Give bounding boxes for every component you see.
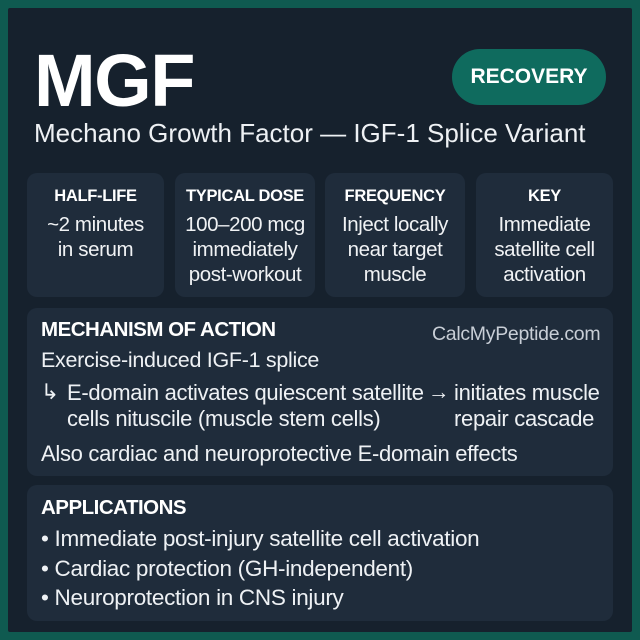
card: typical dose: post-workout <box>189 263 301 286</box>
list: applications: • Immediate post-injury satellite cell activation <box>41 526 479 551</box>
card: half-life: HALF-LIFE <box>54 187 137 205</box>
card: frequency: muscle <box>364 263 426 286</box>
card: key <box>476 173 613 297</box>
panel: mechanism of action <box>27 308 613 476</box>
text: also: Also cardiac and neuroprotective E-domain effects <box>41 441 518 466</box>
text: cascade: ↳ <box>41 380 59 404</box>
card: frequency: Inject locally <box>342 213 448 236</box>
card: typical dose: TYPICAL DOSE <box>186 187 304 205</box>
text: cascade: initiates muscle <box>454 380 600 405</box>
list: applications <box>41 526 479 610</box>
card: frequency: FREQUENCY <box>345 187 445 205</box>
card: key: activation <box>503 263 586 286</box>
text: cascade <box>41 380 600 431</box>
card: frequency: near target <box>348 238 442 261</box>
subtitle: Mechano Growth Factor — IGF-1 Splice Variant <box>34 118 586 148</box>
badge: recovery <box>452 49 606 105</box>
watermark: CalcMyPeptide.com <box>432 323 600 345</box>
card: typical dose: immediately <box>193 238 297 261</box>
card: half-life <box>27 173 164 297</box>
card: half-life: in serum <box>58 238 133 261</box>
card: key: KEY <box>528 187 561 205</box>
heading: mechanism: MECHANISM OF ACTION <box>41 318 276 341</box>
card: key: satellite cell <box>494 238 595 261</box>
heading: applications: APPLICATIONS <box>41 496 186 519</box>
card: typical dose: 100–200 mcg <box>185 213 305 236</box>
text: cascade: → <box>428 380 449 404</box>
list: applications: • Neuroprotection in CNS injury <box>41 585 343 610</box>
card: key: Immediate <box>498 213 591 236</box>
text: mechanism body: Exercise-induced IGF-1 splice <box>41 348 319 372</box>
card: half-life: ~2 minutes <box>47 213 144 236</box>
list: applications: • Cardiac protection (GH-independent) <box>41 556 413 580</box>
text: cascade: cells nituscile (muscle stem cells) <box>67 406 380 431</box>
text: cascade: repair cascade <box>454 406 594 431</box>
card: frequency <box>325 173 465 297</box>
card: typical dose <box>175 173 315 297</box>
panel: applications <box>27 485 613 621</box>
text: cascade: E-domain activates quiescent satellite <box>67 380 424 405</box>
badge: recovery: RECOVERY <box>470 65 588 88</box>
title: MGF <box>34 39 194 122</box>
